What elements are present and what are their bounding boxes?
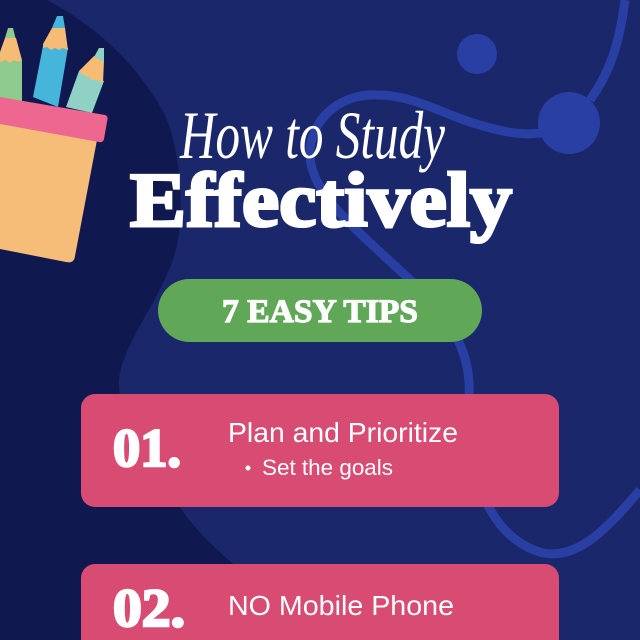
card 02 — [81, 564, 559, 640]
number 01: 01. — [113, 418, 181, 478]
decorative small circle — [457, 34, 497, 74]
tips pill — [158, 279, 482, 342]
cup body — [0, 122, 97, 262]
number 02: 02. — [113, 578, 185, 638]
blue pencil — [33, 16, 68, 107]
decorative curved line — [310, 0, 640, 554]
background dark blob — [0, 0, 240, 640]
card 01 heading: Plan and Prioritize — [228, 417, 458, 448]
pill label: 7 EASY TIPS — [222, 294, 418, 330]
decorative large circle — [538, 92, 600, 154]
card 02 heading: NO Mobile Phone — [228, 590, 454, 621]
card 01 — [81, 394, 559, 507]
card 01 bullet text: Set the goals — [262, 455, 393, 480]
cup rim — [0, 97, 108, 142]
title script line: How to Study — [179, 97, 446, 173]
green pencil — [0, 28, 22, 104]
bullet — [246, 466, 250, 470]
icon: pencil cup — [0, 16, 108, 262]
teal pencil — [66, 48, 104, 113]
title main word: Effectively — [130, 157, 512, 243]
